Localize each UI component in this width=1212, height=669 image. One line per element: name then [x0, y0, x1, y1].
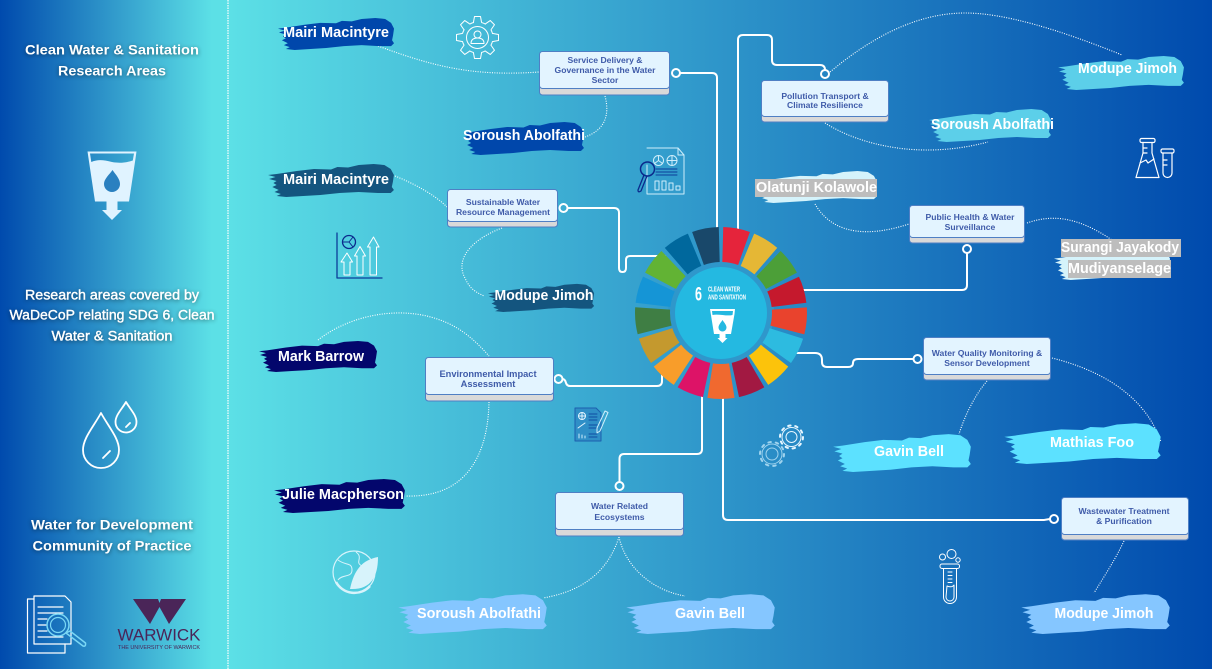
SDG 6 title: [708, 286, 746, 302]
community heading: Water for Development: [31, 518, 194, 532]
icon: report with magnifier: [638, 148, 684, 194]
card: Environmental Impact Assessment: Assessment: [461, 379, 515, 389]
card: Wastewater Treatment & Purification: Wastewater Treatment: [1079, 506, 1170, 516]
name: Mairi Macintyre (water resources): Mairi Macintyre: [283, 172, 389, 188]
card: Service Delivery & Governance: Governance in the Water: [555, 65, 656, 75]
card: Water Related Ecosystems: Ecosystems: [594, 512, 645, 522]
name: Soroush Abolfathi (pollution): Soroush Abolfathi: [931, 117, 1054, 133]
name: Mathias Foo: Mathias Foo: [1050, 435, 1134, 451]
card: Water Quality Monitoring & Sensor Development: [924, 338, 1050, 380]
community heading: [31, 518, 194, 554]
name: Modupe Jimoh (pollution): [1058, 56, 1184, 90]
icon: growth chart: [337, 233, 382, 278]
name: Gavin Bell (ecosystems): [626, 594, 775, 634]
name: Soroush Abolfathi (ecosystems): Soroush Abolfathi: [417, 606, 541, 622]
card: Service Delivery & Governance: Sector: [592, 75, 619, 85]
icon: document with magnifier: [28, 596, 86, 653]
card: Sustainable Water Resource Management: Resource Management: [456, 207, 550, 217]
dotted links between research areas and researchers: [318, 13, 1161, 598]
card: Public Health & Water Surveillance: [910, 206, 1024, 243]
icon: gear with person: [456, 16, 498, 58]
card: Water Quality Monitoring & Sensor Development: Water Quality Monitoring &: [932, 348, 1042, 358]
name: Mairi Macintyre (service delivery): Mairi Macintyre: [283, 25, 389, 41]
SDG 6 number: 6: [695, 284, 702, 306]
name: Surangi Jayakody Mudiyanselage: [1054, 239, 1181, 280]
card: Environmental Impact Assessment: [426, 358, 554, 401]
name: Mairi Macintyre (water resources): [268, 164, 394, 197]
sidebar description: Water & Sanitation: [52, 328, 172, 344]
name: Mark Barrow: [259, 341, 377, 372]
icon: gears: [760, 426, 803, 466]
name: Mairi Macintyre (service delivery): [278, 18, 394, 50]
wheel segments: [624, 216, 818, 410]
card: Water Related Ecosystems: Water Related: [591, 501, 648, 511]
name: Gavin Bell (water quality): [833, 434, 971, 472]
card: Public Health & Water Surveillance: Public Health & Water: [926, 212, 1015, 222]
icon: water drops: [83, 402, 136, 468]
name: Modupe Jimoh (water resources): Modupe Jimoh: [494, 288, 594, 304]
card: Wastewater Treatment & Purification: [1062, 498, 1188, 540]
name: Modupe Jimoh (wastewater): Modupe Jimoh: [1054, 606, 1154, 622]
left sidebar panel: [0, 0, 228, 669]
name: Gavin Bell (water quality): Gavin Bell: [874, 444, 944, 460]
card: Water Quality Monitoring & Sensor Development: Sensor Development: [944, 358, 1030, 368]
card: Environmental Impact Assessment: Environmental Impact: [439, 369, 537, 379]
Warwick logo: WARWICK: [118, 626, 201, 644]
Warwick logo: [118, 599, 201, 651]
name: Soroush Abolfathi (ecosystems): [398, 594, 547, 634]
name: Olatunji Kolawole: [755, 171, 877, 203]
name: Julie Macpherson: [274, 479, 405, 513]
card: Pollution Transport & Climate Resilience: Climate Resilience: [787, 100, 863, 110]
name: Modupe Jimoh (pollution): Modupe Jimoh: [1078, 61, 1177, 77]
SDG wheel: [624, 216, 818, 410]
Warwick logo: THE UNIVERSITY OF WARWICK: [118, 645, 200, 651]
sidebar description: WaDeCoP relating SDG 6, Clean: [10, 308, 215, 322]
card: Service Delivery & Governance: [540, 52, 670, 95]
sidebar description: [10, 288, 215, 344]
name: Gavin Bell (ecosystems): Gavin Bell: [675, 606, 745, 622]
sidebar description: Research areas covered by: [25, 288, 199, 302]
wheel centre: [675, 267, 767, 359]
card: Pollution Transport & Climate Resilience: Pollution Transport &: [781, 91, 869, 101]
card: Public Health & Water Surveillance: Surveillance: [945, 222, 996, 232]
name: Modupe Jimoh (wastewater): [1021, 594, 1170, 634]
name: Soroush Abolfathi (service delivery): [463, 122, 585, 155]
card: Sustainable Water Resource Management: [448, 190, 558, 227]
name: Surangi Jayakody Mudiyanselage: Mudiyanselage: [1068, 261, 1171, 277]
icon: globe with leaf: [333, 551, 378, 593]
icon: flask and test tube: [1136, 138, 1174, 178]
name: Surangi Jayakody Mudiyanselage: Surangi Jayakody: [1061, 240, 1179, 256]
name: Julie Macpherson: Julie Macpherson: [282, 487, 404, 503]
name: Mathias Foo: [1004, 423, 1161, 464]
sidebar heading: [25, 42, 199, 78]
name: Soroush Abolfathi (service delivery): Soroush Abolfathi: [463, 128, 585, 144]
icon: SDG 6 glass: [710, 309, 735, 343]
community heading: Community of Practice: [32, 538, 192, 554]
icon: document with pen: [575, 408, 608, 441]
sidebar heading: Clean Water & Sanitation: [25, 42, 199, 58]
sidebar heading: Research Areas: [58, 64, 166, 78]
card: Water Related Ecosystems: [556, 492, 684, 536]
card: Wastewater Treatment & Purification: & Purification: [1096, 516, 1152, 526]
SDG 6 title: CLEAN WATER: [708, 286, 740, 294]
name: Olatunji Kolawole: Olatunji Kolawole: [756, 180, 877, 196]
icon: glass with water drop: [88, 152, 136, 220]
card: Sustainable Water Resource Management: Sustainable Water: [466, 197, 541, 207]
card: Service Delivery & Governance: Service Delivery &: [567, 55, 643, 65]
SDG 6 title: AND SANITATION: [708, 294, 746, 302]
connector lines from wheel to research areas: [554, 35, 1058, 523]
name: Mark Barrow: Mark Barrow: [278, 349, 365, 365]
icon: test tube with bubbles: [940, 550, 960, 604]
name: Modupe Jimoh (water resources): [488, 284, 594, 312]
name: Soroush Abolfathi (pollution): [929, 109, 1054, 142]
card: Pollution Transport & Climate Resilience: [762, 80, 888, 122]
